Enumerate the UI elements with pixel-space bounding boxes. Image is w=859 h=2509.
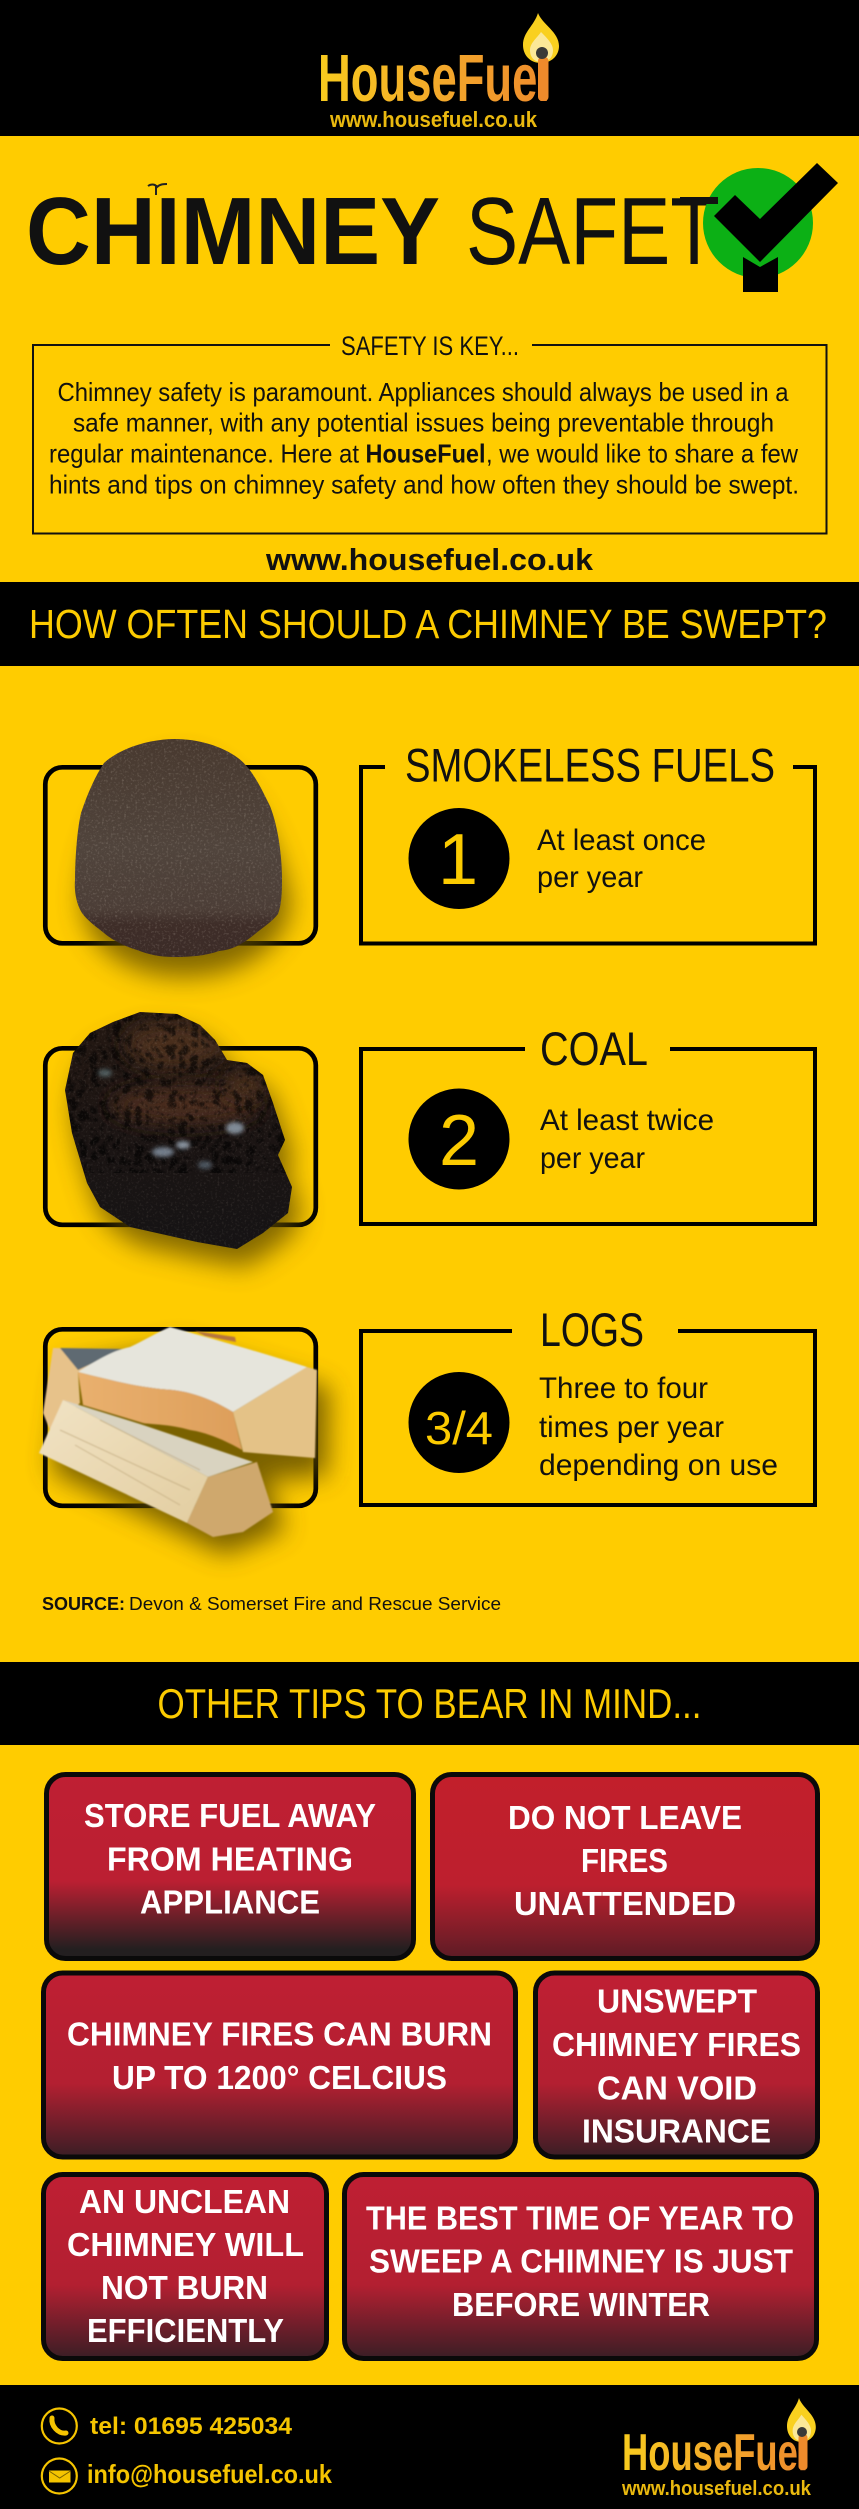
tip card: best time of year: BEFORE WINTER — [452, 2286, 710, 2323]
row: logs — [39, 1303, 815, 1555]
section heading band: other tips — [0, 1662, 859, 1745]
tip card: unclean chimney: CHIMNEY WILL — [67, 2226, 304, 2263]
panel heading: SAFETY IS KEY... — [341, 331, 519, 361]
tip card: unattended: FIRES — [581, 1842, 668, 1879]
number badge — [408, 808, 510, 909]
frequency text — [540, 1104, 714, 1175]
icon: smokeless briquette — [70, 735, 290, 977]
icon: green tick forming the Y — [680, 163, 838, 292]
icon: stacked logs — [39, 1327, 329, 1555]
number badge — [408, 1088, 510, 1190]
tip card: store fuel: FROM HEATING — [107, 1840, 353, 1878]
frequency text: per year — [537, 861, 643, 894]
panel: safety is key — [33, 331, 826, 534]
logo url: www.housefuel.co.uk — [329, 107, 538, 132]
info box — [361, 767, 815, 944]
info box — [361, 1049, 815, 1224]
footer logo url: www.housefuel.co.uk — [621, 2478, 812, 2500]
footer logo — [621, 2398, 816, 2500]
title: SAFET — [466, 178, 718, 285]
source note: SOURCE: — [42, 1593, 125, 1614]
tip card: unattended — [432, 1774, 818, 1958]
tip card: insurance: UNSWEPT — [597, 1983, 757, 2020]
intro paragraph: Chimney safety is paramount. Appliances should always be used in a — [58, 377, 789, 407]
tip card: insurance — [536, 1973, 818, 2157]
image frame — [45, 1048, 316, 1225]
tip card: insurance: CAN VOID — [597, 2070, 757, 2106]
intro paragraph: regular maintenance. Here at — [49, 439, 360, 469]
frequency text: At least twice — [540, 1104, 714, 1137]
header band with logo — [0, 0, 859, 136]
frequency text: times per year — [539, 1411, 724, 1444]
tip card: chimney fires temperature: CHIMNEY FIRES CAN BURN — [67, 2016, 492, 2052]
tip card: unattended: UNATTENDED — [514, 1885, 736, 1922]
icon: envelope — [42, 2458, 77, 2494]
row: coal — [45, 1008, 815, 1267]
heading: LOGS — [540, 1303, 644, 1356]
number badge: 2 — [439, 1101, 479, 1181]
frequency text: per year — [540, 1142, 645, 1175]
intro paragraph: , we would like to share a few — [486, 439, 798, 469]
number badge: 3/4 — [425, 1402, 493, 1454]
icon: lump of coal — [60, 1008, 300, 1267]
tip card: unattended: DO NOT LEAVE — [508, 1799, 742, 1836]
frequency text: At least once — [537, 824, 706, 857]
website link: www.housefuel.co.uk — [265, 542, 594, 577]
frequency text — [537, 824, 706, 894]
tip card: store fuel: APPLIANCE — [140, 1884, 320, 1921]
tip card: insurance: INSURANCE — [582, 2113, 771, 2150]
frequency text — [539, 1372, 778, 1482]
image frame — [45, 1329, 316, 1506]
title — [26, 178, 718, 285]
tip card: unclean chimney — [44, 2174, 326, 2358]
frequency text: Three to four — [539, 1372, 708, 1405]
section heading band: how often — [0, 582, 859, 666]
telephone number: tel: 01695 425034 — [90, 2413, 293, 2440]
heading: SMOKELESS FUELS — [405, 739, 775, 792]
intro paragraph: HouseFuel — [366, 439, 486, 469]
number badge: 1 — [438, 820, 478, 900]
intro paragraph — [49, 377, 799, 500]
tip card: best time of year — [344, 2174, 816, 2358]
intro paragraph: safe manner, with any potential issues being preventable through — [73, 408, 774, 438]
email address: info@housefuel.co.uk — [87, 2459, 332, 2489]
heading: COAL — [540, 1022, 648, 1075]
number badge — [408, 1372, 510, 1473]
tip card: chimney fires temperature: UP TO 1200° CELCIUS — [112, 2059, 447, 2096]
image frame — [45, 767, 316, 943]
tip card: insurance: CHIMNEY FIRES — [552, 2026, 801, 2063]
tip card: unclean chimney: AN UNCLEAN — [79, 2183, 290, 2220]
title: CHIMNEY — [26, 178, 440, 285]
icon: match flame — [523, 13, 559, 101]
intro paragraph: hints and tips on chimney safety and how often they should be swept. — [49, 470, 799, 500]
tip card: unclean chimney: NOT BURN — [101, 2269, 268, 2306]
logo wordmark: HouseFuel — [318, 41, 550, 116]
tip card: chimney fires temperature — [44, 1973, 516, 2157]
tip card: store fuel — [46, 1774, 414, 1958]
tip card: best time of year: THE BEST TIME OF YEAR TO — [366, 2200, 794, 2236]
section heading band: other tips: OTHER TIPS TO BEAR IN MIND... — [158, 1680, 702, 1727]
info box — [361, 1331, 815, 1505]
icon: phone — [42, 2408, 77, 2444]
row: smokeless fuels — [45, 735, 815, 977]
icon: footer match flame — [787, 2398, 816, 2470]
icon: sprout on the I — [148, 184, 167, 195]
footer band — [0, 2385, 859, 2509]
tip card: best time of year: SWEEP A CHIMNEY IS JUST — [369, 2243, 793, 2280]
source note: Devon & Somerset Fire and Rescue Service — [129, 1593, 501, 1614]
frequency text: depending on use — [539, 1449, 778, 1482]
tip card: unclean chimney: EFFICIENTLY — [87, 2312, 284, 2349]
tip card: store fuel: STORE FUEL AWAY — [84, 1797, 376, 1834]
